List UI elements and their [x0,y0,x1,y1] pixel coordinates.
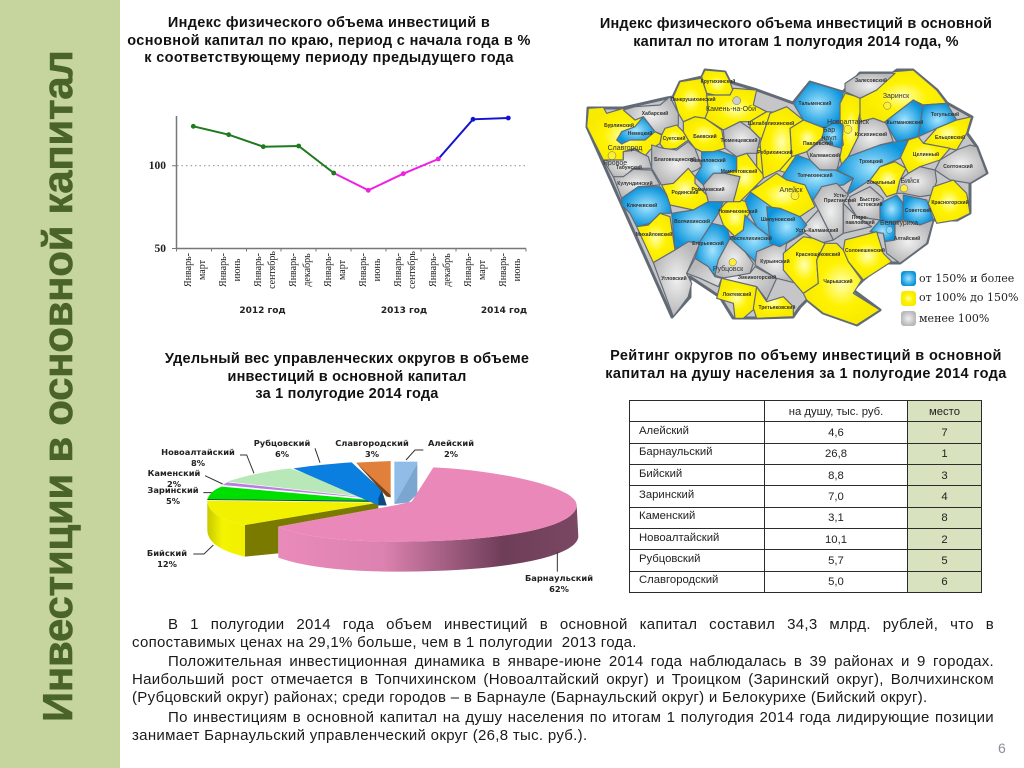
heading: line chart title [127,15,531,66]
sidebar: vertical title band [0,0,120,768]
line chart: investment index: декабрь [442,253,453,287]
Новоалтайский slice [227,468,378,498]
map labels: Романовский [691,186,725,193]
map labels: Суетский [663,135,685,142]
pie labels: 8% [191,458,206,468]
table: ranking of districts [629,400,982,593]
table: ranking of districts: 6 [941,576,948,588]
map labels: Бурлинский [604,122,634,129]
map labels: Быстро- [860,197,881,203]
map labels: Солтонский [943,163,973,170]
heading: pie chart title: Удельный вес управленческих округов в объеме [165,351,529,367]
Алейский slice [394,462,417,504]
map labels: Павловский [803,140,833,147]
pie labels: Заринский [147,485,199,495]
map labels: Красногорский [931,199,969,206]
map: Altai Krai districts: Бийск [901,177,920,185]
map labels: Чарышский [823,278,853,285]
map: Altai Krai districts: Новоалтайск [827,118,870,126]
map labels: Поспелихинский [730,235,772,242]
pie labels: Каменский [148,468,201,478]
map labels: Троицкий [859,158,883,165]
pie labels: 12% [157,559,178,569]
map labels: Тогульский [931,111,959,118]
table: ranking of districts: 5,0 [828,576,844,588]
map labels: Егорьевский [692,240,724,247]
map: Altai Krai districts: Славгород [608,145,642,152]
text block: summary: сопоставимых ценах на 29,1% больше, чем в 1 полугодии 2013 года. [132,634,637,651]
Рубцовский slice [293,462,387,505]
table: ranking of districts: 7 [941,427,948,439]
line chart: investment index: Январь- [428,253,439,287]
map labels: Зональный [867,179,895,186]
line chart: investment index: март [197,259,208,280]
heading: line chart title: к соответствующему периоду предыдущего года [144,50,514,66]
pie labels [147,438,593,594]
table: ranking of districts: 2 [941,534,948,546]
map labels: Пристанский [824,197,856,204]
map labels: Волчихинский [674,218,710,225]
line chart: investment index: март [337,259,348,280]
table: ranking of districts: Заринский [639,489,694,501]
table: ranking of districts: Рубцовский [639,553,700,565]
table: ranking of districts: 1 [941,448,948,460]
pie chart: share of districts [147,438,593,594]
map labels: Баевский [693,133,717,140]
table: ranking of districts: 8,8 [828,470,844,482]
map labels: Топчихинский [797,172,833,179]
map: Altai Krai districts: Бар [823,127,835,134]
map labels: Родинский [672,189,698,196]
table: ranking of districts: 8 [941,512,948,524]
map labels: Солонешенский [845,247,885,254]
line chart: investment index: сентябрь [267,251,278,289]
table: ranking of districts: Бийский [639,468,682,480]
table: ranking of districts: 26,8 [825,448,847,460]
map labels: Косихинский [855,131,887,138]
legend labels: от 100% до 150% [919,291,1018,304]
line chart: investment index: 2012 год [239,306,286,316]
heading: table title: Рейтинг округов по объему инвестиций в основной [610,348,1002,364]
map labels: Третьяковский [759,304,795,311]
line chart: investment index: декабрь [302,253,313,287]
pie labels: 2% [167,479,182,489]
map: Altai Krai districts: наул [821,135,837,142]
Заринский slice [207,487,378,502]
Бийский slice [207,501,378,557]
map labels: Шипуновский [761,216,795,223]
map labels: Панкрушихинский [670,96,716,103]
pie labels: 5% [166,496,181,506]
map labels: Ельцовский [935,134,965,141]
leader lines [193,448,557,572]
map labels: Тюменцевский [721,137,757,144]
map labels: Хабарский [642,110,668,117]
map labels: Петро- [852,215,869,221]
table: ranking of districts: Славгородский [639,574,718,586]
table: ranking of districts: 4,6 [828,427,844,439]
text block: summary: Положительная инвестиционная динамика в январе-июне 2014 года наблюдалась в 39 районах и 9 городах. [168,653,994,670]
line chart: investment index: 50 [154,243,166,255]
legend labels: менее 100% [919,312,989,325]
map labels: павловский [845,219,875,226]
table: ranking of districts: место [929,406,960,418]
map: Altai Krai districts: Рубцовск [713,265,744,273]
heading: line chart title: основной капитал по краю, период с начала года в % [127,32,531,48]
line chart: investment index: март [477,259,488,280]
Славгородский slice [356,461,391,495]
line chart: investment index: Январь- [323,253,334,287]
line chart: investment index: 2014 год [481,306,527,316]
pie labels: Рубцовский [254,438,310,448]
table: ranking of districts: 3 [941,470,948,482]
table: ranking of districts: 7,0 [828,491,844,503]
line chart: investment index: 100 [149,160,166,172]
map labels: Целинный [913,151,939,158]
pie labels: 3% [365,449,380,459]
map outline [587,70,987,325]
line chart: investment index: Январь- [288,253,299,287]
map: Altai Krai districts: Яровое [603,160,627,167]
map: Altai Krai districts: Алейск [779,186,803,194]
text block: summary: занимает Барнаульский управленческий округ (26,8 тыс. руб.). [132,727,587,744]
map labels: Угловский [661,275,687,282]
pie labels: 62% [549,584,570,594]
map: Altai Krai districts: Белокуриха [880,220,918,227]
line chart: investment index: июнь [372,258,383,281]
map labels: Кытмановский [887,119,923,126]
line chart: investment index: июнь [232,258,243,281]
pie labels: Славгородский [335,438,409,448]
map labels: истокский [857,201,883,208]
map labels: Михайловский [636,231,672,238]
pie labels: Новоалтайский [161,447,235,457]
map labels: Усть-Калманский [796,227,838,234]
sidebar: vertical title band: Инвестиции в основной капитал [34,50,81,722]
pie labels: Алейский [428,438,474,448]
map labels [604,77,973,311]
table: ranking of districts: Барнаульский [639,446,712,458]
pie labels: 6% [275,449,290,459]
text block: summary: (Рубцовский округ) районах; среди городов – в Барнауле (Барнаульский округ) и Белокурихе (Бийский округ). [132,689,928,706]
map labels: Мамонтовский [721,168,757,175]
text block: summary: В 1 полугодии 2014 года объем инвестиций в основной капитал составил 34,3 млрд. рублей, что в [168,616,994,633]
heading: pie chart title: за 1 полугодие 2014 года [255,386,439,402]
legend labels: от 150% и более [919,272,1014,285]
heading: table title: капитал на душу населения за 1 полугодие 2014 года [605,366,1007,382]
line chart: investment index: Январь- [463,253,474,287]
map labels: Шелаболихинский [748,120,794,127]
table: ranking of districts: 10,1 [825,534,847,546]
map labels: Кулундинский [617,180,653,187]
map labels: Змеиногорский [738,274,776,281]
map: Altai Krai districts: Заринск [883,93,910,100]
map labels: Новичихинский [718,208,758,215]
line chart: investment index: Январь- [183,253,194,287]
table: ranking of districts: 3,1 [828,512,844,524]
map labels: Тальменский [799,100,831,107]
text block: summary: По инвестициям в основной капитал на душу населения по итогам 1 полугодия 2014 года лидирующие позиции [168,709,994,726]
legend swatches [901,271,916,326]
map labels: Курьинский [760,258,790,265]
heading: map title: Индекс физического объема инвестиций в основной [600,16,992,32]
legend labels [919,272,1018,325]
map labels: Завьяловский [690,157,726,164]
map labels: Алтайский [894,235,920,242]
map labels: Краснощёковский [796,251,840,258]
line chart: investment index: Январь- [218,253,229,287]
pie labels: 2% [444,449,459,459]
map labels: Табунский [616,164,642,171]
line chart: investment index: Январь- [498,253,509,287]
heading: map title [600,16,992,50]
heading: line chart title: Индекс физического объема инвестиций в [168,15,490,31]
map labels: Советский [905,207,931,214]
pie labels: Бийский [147,548,187,558]
line chart: investment index: сентябрь [407,251,418,289]
line chart: investment index: Январь- [253,253,264,287]
map labels: Залесовский [855,77,887,84]
text block: summary [132,616,994,744]
table: ranking of districts: 5 [941,555,948,567]
map: Altai Krai districts: Камень-на-Оби [706,105,756,113]
map labels: Ребрихинский [757,149,793,156]
heading: table title [605,348,1007,382]
Каменский slice [223,482,378,499]
table: ranking of districts: Каменский [639,510,695,522]
table: ranking of districts: Алейский [639,425,689,437]
map labels: Благовещенский [654,156,696,163]
map: Altai Krai districts [586,68,988,326]
table: ranking of districts: на душу, тыс. руб. [789,406,883,418]
map legend [901,271,1018,326]
text block: summary: Наибольший рост отмечается в Топчихинском (Новоалтайский округ) и Троицком (Заринский округ), Волчихинском [132,671,994,688]
heading: pie chart title: инвестиций в основной капитал [227,368,467,384]
page number: 6 [998,740,1006,756]
line chart: investment index: Январь- [393,253,404,287]
map labels: Калманский [810,152,840,159]
map labels: Ключевский [627,202,657,209]
map labels: Усть- [834,193,847,199]
Барнаульский slice [278,467,578,572]
table: ranking of districts: 4 [941,491,948,503]
map labels: Крутихинский [701,78,735,85]
table: ranking of districts: Новоалтайский [639,532,719,544]
heading: pie chart title [164,351,529,402]
line chart: investment index: Январь- [358,253,369,287]
table: ranking of districts: 5,7 [828,555,844,567]
map labels: Немецкий [628,130,652,137]
line chart: investment index: 2013 год [381,306,427,316]
line chart: investment index [149,116,527,316]
pie labels: Барнаульский [525,573,593,583]
heading: map title: капитал по итогам 1 полугодия 2014 года, % [633,34,959,50]
map labels: Локтевский [723,291,751,298]
line chart: investment index: июнь [512,258,523,281]
